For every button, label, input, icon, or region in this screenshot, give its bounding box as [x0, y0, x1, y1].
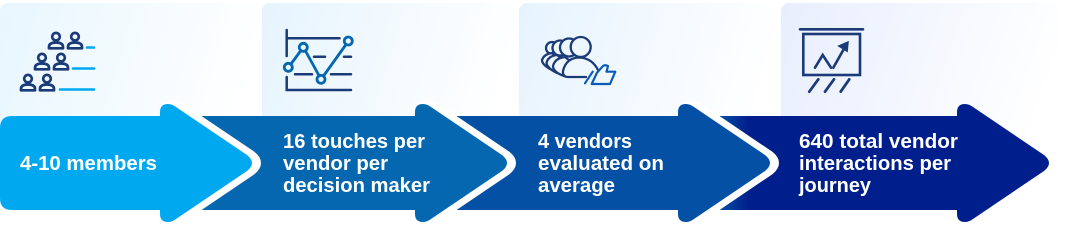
text: step 2: decision maker: [283, 175, 430, 197]
text: step 3: average: [538, 175, 615, 197]
text: step 2: 16 touches per: [283, 131, 425, 153]
text: step 3: 4 vendors: [538, 131, 632, 153]
text: step 4: [798, 131, 958, 197]
arrow: step 1: [0, 104, 257, 222]
text: step 1: 4-10 members: [20, 153, 157, 175]
text: step 4: interactions per: [799, 153, 951, 175]
icon: presentation board: [800, 29, 863, 92]
icon: vendors with thumbs up: [542, 37, 615, 84]
arrow: step 3: [455, 104, 775, 222]
text: step 4: journey: [798, 175, 872, 197]
text: step 4: 640 total vendor: [799, 131, 958, 153]
text: step 2: vendor per: [283, 153, 388, 175]
panel: step 4 background: [781, 3, 1061, 210]
panel: step 1 background: [0, 3, 260, 210]
panel: step 3 background: [519, 3, 777, 210]
panel: step 2 background: [262, 3, 516, 210]
icon: line chart: [284, 30, 352, 90]
text: step 3: [538, 131, 664, 197]
arrow: step 2: [200, 104, 512, 222]
text: step 2: [283, 131, 430, 197]
arrow: step 4: [718, 104, 1049, 222]
text: step 3: evaluated on: [538, 153, 664, 175]
icon: team members: [21, 33, 94, 90]
